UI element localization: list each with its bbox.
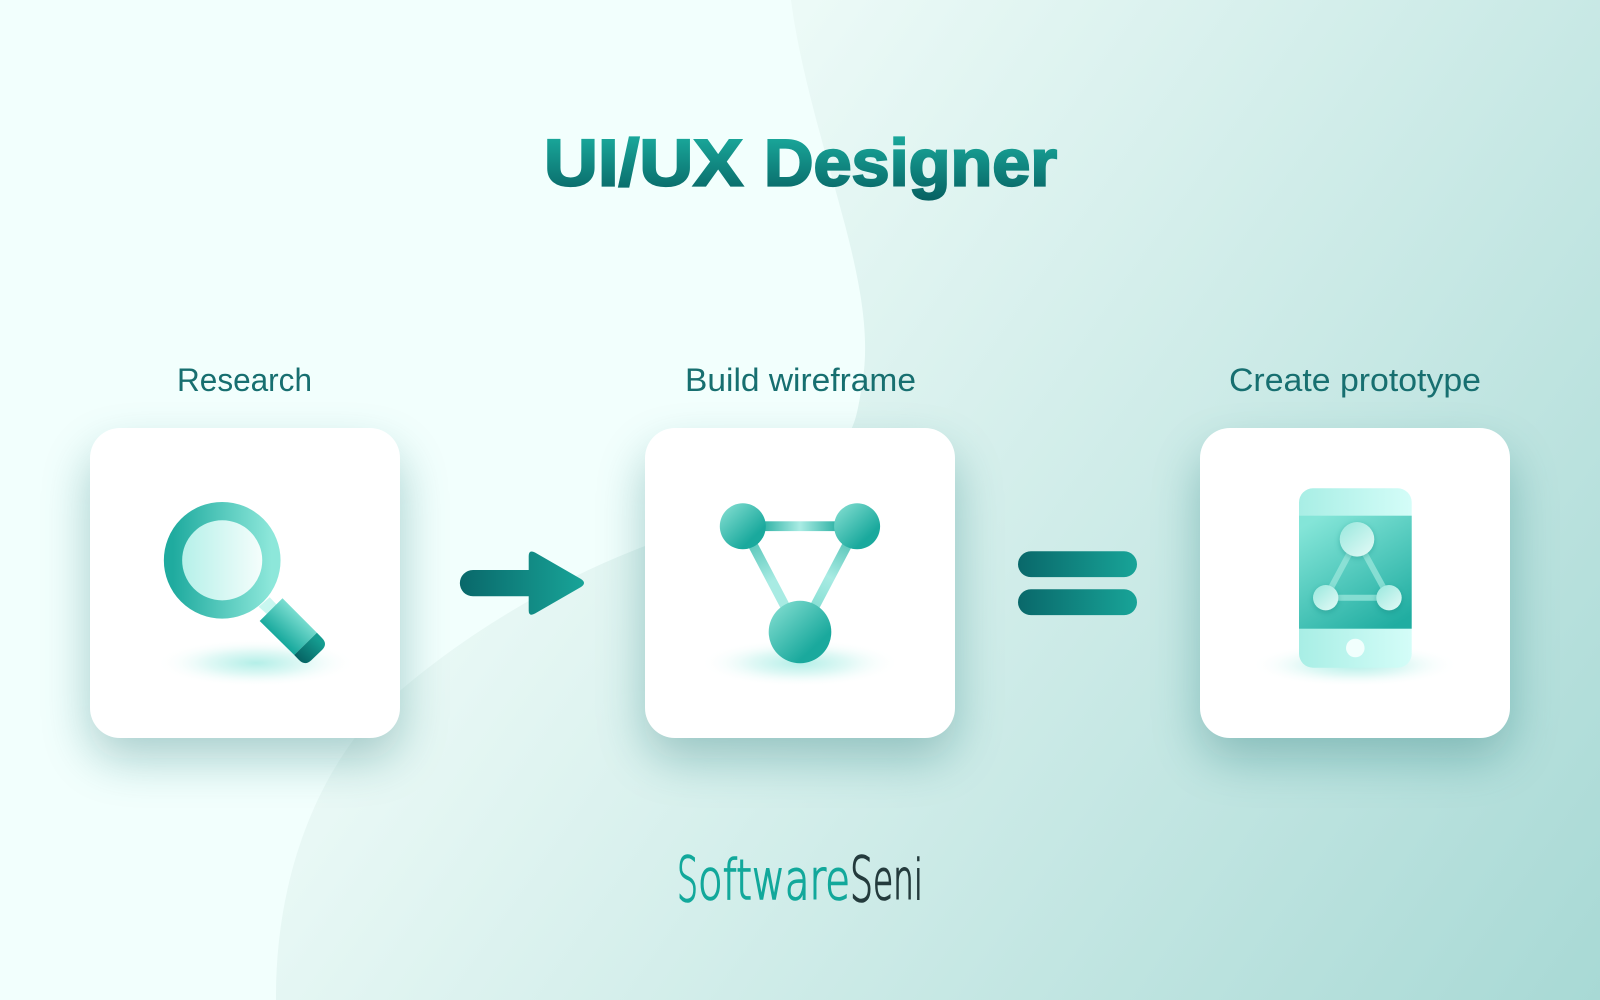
panel: wireframe card	[645, 428, 955, 758]
label: Create prototype: Create prototype	[1229, 362, 1481, 398]
title: UI/UX	[544, 126, 743, 200]
icon: magnifying glass	[156, 511, 356, 687]
title: Designer	[764, 126, 1057, 200]
icon: wireframe nodes	[700, 503, 900, 687]
arrow	[460, 552, 584, 615]
logo: SoftwareSeni: S	[677, 843, 698, 916]
title	[544, 126, 1057, 200]
logo: SoftwareSeni: eni	[873, 848, 923, 912]
label: Research: Research	[177, 362, 312, 398]
panel: prototype card	[1200, 428, 1510, 758]
logo: SoftwareSeni: S	[850, 843, 873, 916]
panel: research card	[90, 428, 400, 758]
equals sign	[1018, 551, 1137, 615]
label: Build wireframe: Build wireframe	[685, 362, 916, 398]
logo: SoftwareSeni: oftware	[698, 848, 850, 912]
icon: phone prototype	[1251, 488, 1459, 687]
